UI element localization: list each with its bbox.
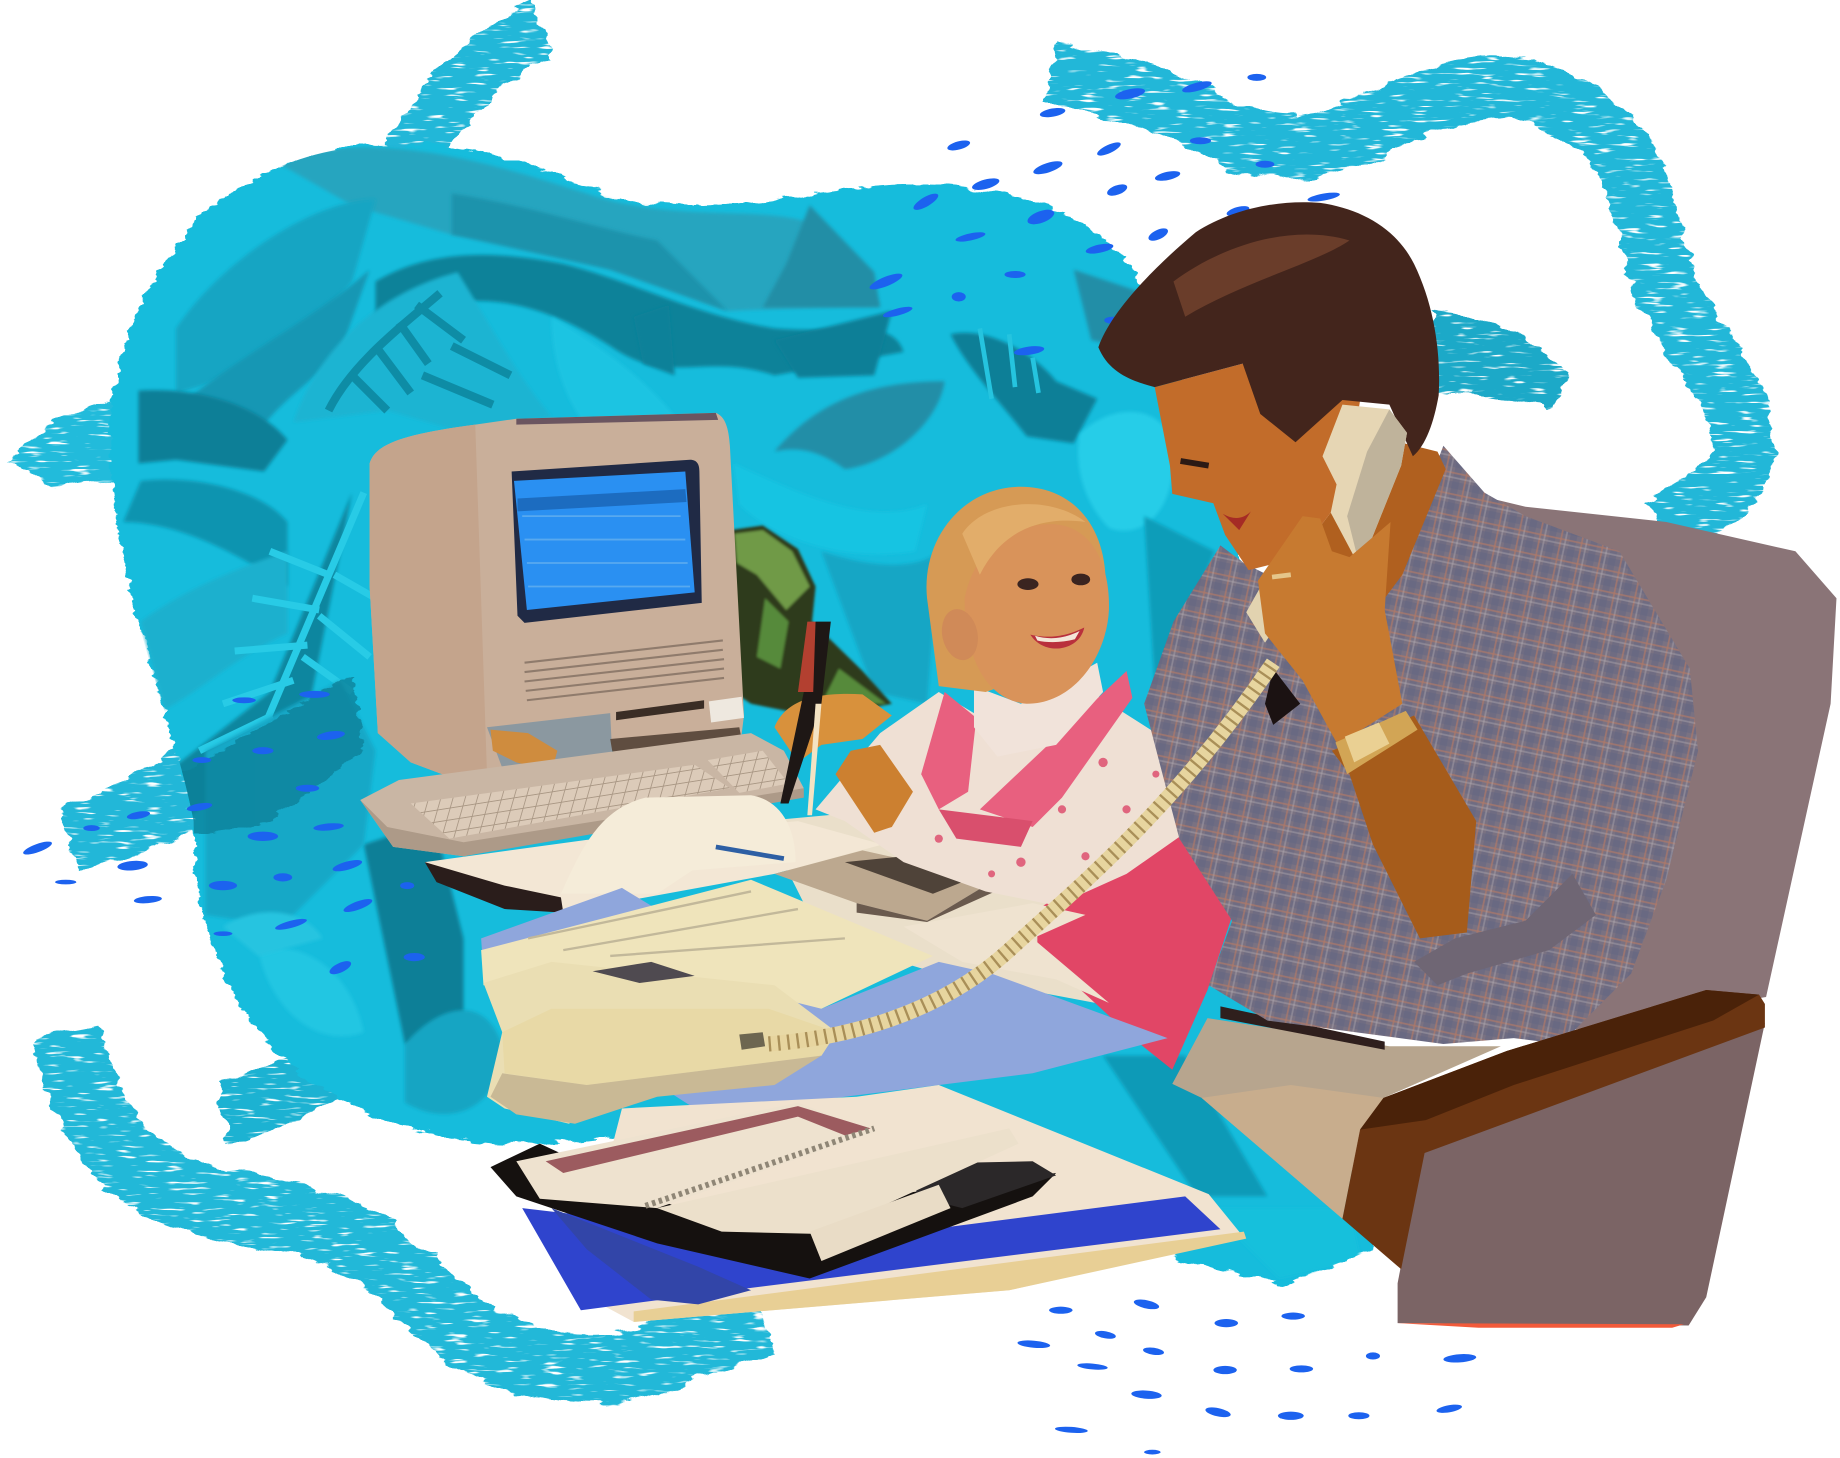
book pile — [491, 1085, 1246, 1322]
brush stroke: lower-left band — [59, 692, 340, 870]
forearm — [1332, 716, 1476, 938]
monitor top edge — [516, 413, 718, 425]
keypad — [593, 962, 695, 983]
blue folder — [481, 888, 1168, 1114]
hair — [1098, 202, 1439, 456]
monitor side panel — [370, 425, 487, 780]
plant-side dark band — [821, 551, 939, 704]
computer — [370, 413, 744, 780]
face — [965, 524, 1109, 704]
brush stroke: top-right wavy loop — [1050, 73, 1743, 528]
telephone base — [483, 962, 837, 1124]
pens — [780, 622, 831, 803]
desk papers — [481, 880, 1168, 1124]
desk surface — [763, 809, 1127, 1009]
hands — [774, 694, 892, 762]
neck — [1296, 434, 1446, 598]
top triangle leaf — [763, 205, 880, 307]
black organizer — [491, 1144, 1056, 1279]
ear — [937, 606, 982, 663]
monitor body — [370, 413, 744, 780]
turtleneck — [974, 663, 1103, 757]
brush stroke: left short stroke — [6, 393, 153, 495]
watch — [1335, 711, 1418, 774]
man — [1098, 202, 1698, 1219]
overlap of lower-left band — [182, 677, 364, 834]
top muted band — [279, 144, 812, 312]
mouth — [1030, 628, 1084, 649]
print hearts — [935, 758, 1159, 877]
open booklet — [657, 1128, 1019, 1234]
belt — [1220, 1006, 1385, 1050]
cream folder — [575, 1085, 1244, 1322]
coiled phone cord — [769, 663, 1273, 1044]
screen display — [514, 472, 695, 610]
lower dark vertical column — [364, 821, 464, 1044]
floppy slot and sticker — [616, 700, 704, 720]
hair back — [926, 487, 1106, 692]
chair back — [1467, 493, 1836, 1038]
bottom-right leaves — [1103, 1056, 1267, 1196]
rolled sleeve knot — [1414, 874, 1596, 985]
shadow under phone — [1265, 669, 1300, 725]
spiral notebook — [516, 1103, 874, 1208]
girl — [774, 487, 1232, 1070]
brush stroke: small bottom-left stroke — [217, 1052, 352, 1144]
upper right muted patch — [1073, 269, 1136, 344]
shark-shaped leaf — [774, 381, 945, 469]
screen bezel — [512, 460, 702, 623]
keys — [411, 765, 730, 839]
eyes — [1017, 578, 1039, 590]
brush stroke: right short stroke — [1434, 310, 1568, 411]
orange bottom edge — [1398, 1323, 1684, 1328]
foliage pattern — [123, 147, 1361, 1279]
keyboard body — [360, 733, 804, 856]
plant — [730, 525, 892, 718]
chair front panel — [1398, 1023, 1765, 1325]
dark right leaf — [951, 333, 1097, 443]
calculator body — [774, 850, 995, 921]
toy and base — [487, 713, 613, 774]
brush stroke: top stem — [411, 29, 542, 158]
handset — [1322, 405, 1407, 568]
trousers — [1172, 1018, 1501, 1219]
mid light leaves — [554, 317, 556, 320]
monitor vents — [525, 640, 724, 700]
top with print — [816, 692, 1191, 906]
face — [1155, 364, 1361, 570]
skirt — [1037, 827, 1232, 1070]
central monstera leaf — [293, 272, 552, 434]
dark canopy band — [376, 255, 904, 375]
chair arm and base — [1342, 990, 1765, 1328]
hand — [1258, 516, 1402, 745]
lower light leaves — [258, 948, 364, 1036]
wooden armrest — [1342, 990, 1765, 1269]
shirt — [1144, 446, 1698, 1044]
right light flower — [1078, 412, 1173, 531]
pink overalls straps — [921, 692, 976, 809]
brush stroke: bottom wave — [68, 1032, 763, 1370]
blob base — [109, 144, 1373, 1284]
calculator — [774, 850, 995, 922]
left dark patch — [138, 390, 288, 472]
blue dashes — [22, 74, 1476, 1454]
document — [481, 880, 933, 1009]
paper roll — [561, 795, 796, 894]
binder and paper roll — [425, 795, 882, 913]
blue binder — [522, 1196, 1220, 1310]
keyboard — [360, 733, 804, 856]
binder — [425, 821, 882, 913]
palm frond lower left — [179, 496, 352, 814]
back papers — [904, 903, 1109, 1003]
upper left leaves — [176, 199, 376, 393]
foliage blob — [109, 144, 1373, 1284]
calculator keys — [845, 856, 974, 894]
